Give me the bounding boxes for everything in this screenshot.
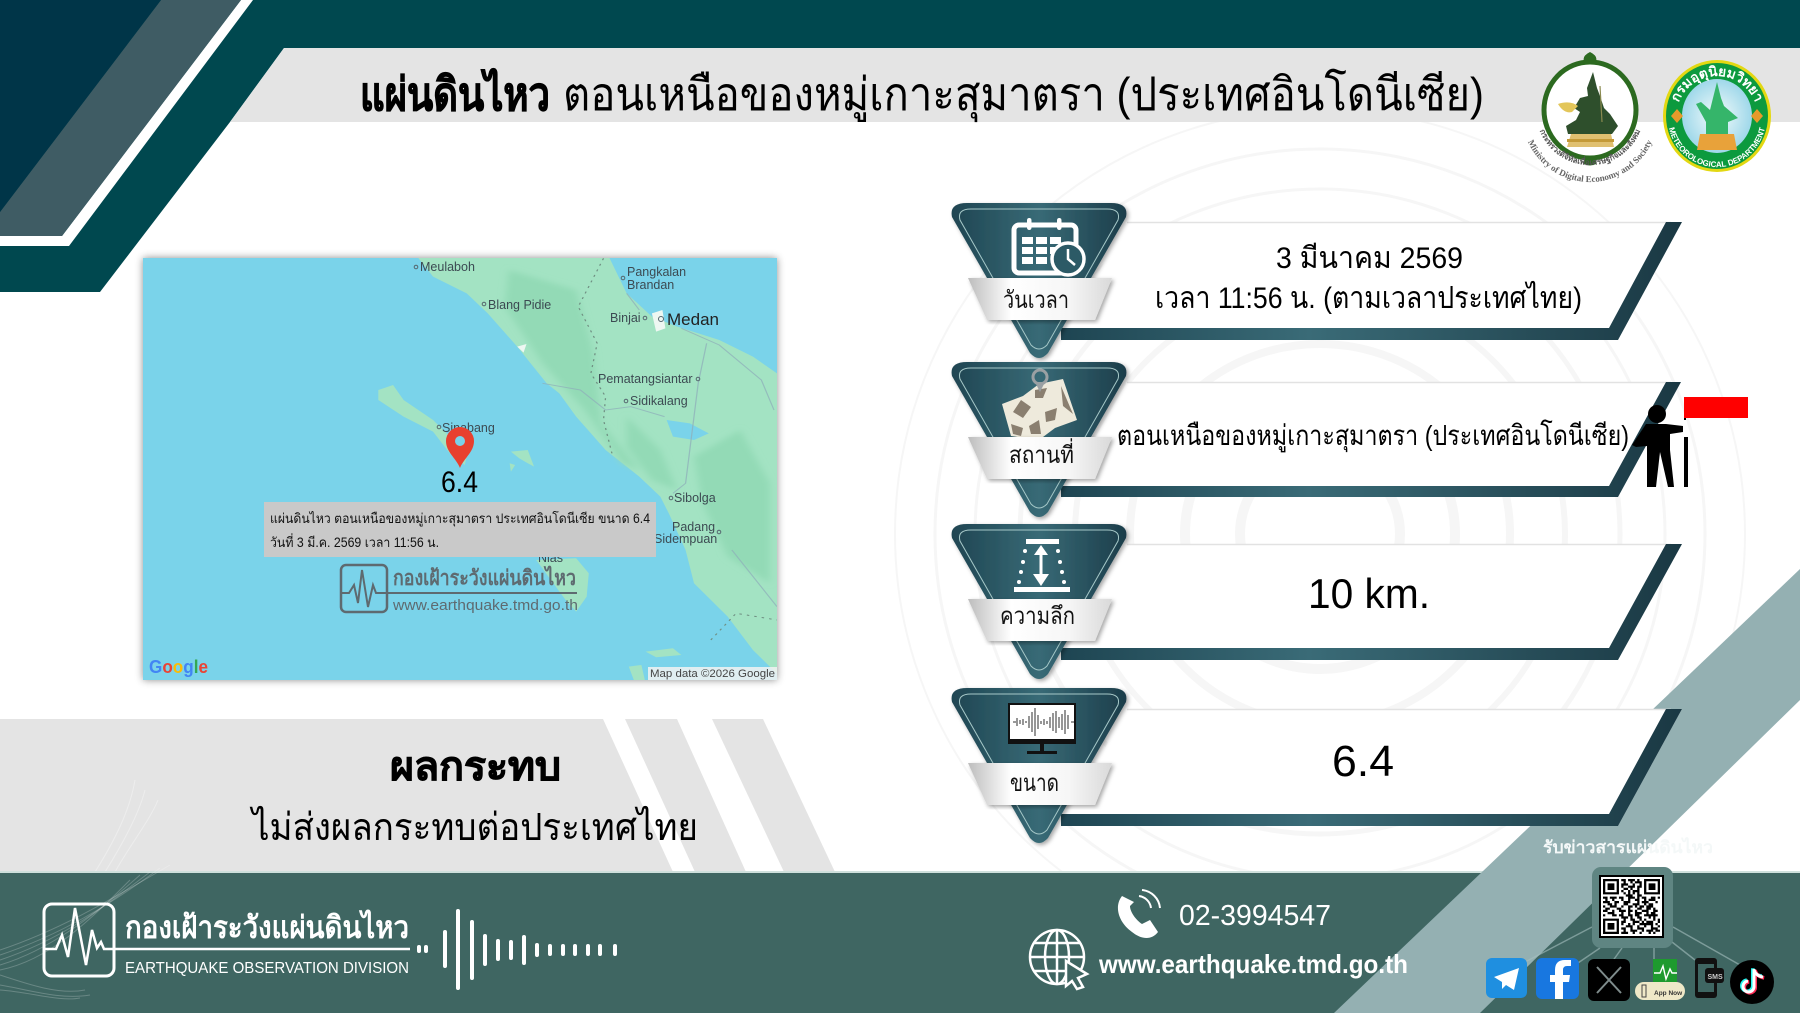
info row: magnitude xyxy=(952,688,1682,843)
ribbon label xyxy=(968,763,1112,805)
info row: location xyxy=(952,362,1681,517)
logo: Meteorological Department: กรมอุตุนิยมวิทยา xyxy=(1672,65,1762,102)
map panel xyxy=(143,250,787,683)
icon: person with red flag xyxy=(1632,397,1748,487)
map: place labels: Binjai xyxy=(610,311,641,325)
logo: Meteorological Department xyxy=(1663,60,1771,172)
map: place labels: Sinabang xyxy=(442,421,495,435)
map: caption box: วันที่ 3 มี.ค. 2569 เวลา 11:56 น. xyxy=(270,533,439,550)
corner: grey slate stripe xyxy=(0,0,241,236)
social icon: earthquake app: App Now xyxy=(1654,990,1683,997)
header: teal top band and corner shape xyxy=(0,0,1800,292)
map: place labels: Brandan xyxy=(627,278,674,292)
footer wave decoration xyxy=(0,865,170,999)
map: lake xyxy=(667,420,709,440)
row 1 panel xyxy=(1061,222,1682,340)
footer waveform xyxy=(419,911,615,988)
web icon xyxy=(1030,930,1087,989)
row 1 value: เวลา 11:56 น. (ตามเวลาประเทศไทย) xyxy=(1155,280,1582,315)
row 2 panel xyxy=(1061,382,1681,497)
map: place labels: Sidempuan xyxy=(654,532,717,546)
corner: dark navy xyxy=(0,0,161,212)
connector lines xyxy=(1525,927,1740,965)
logo: Ministry of Digital Economy and Society xyxy=(1528,52,1652,182)
ribbon label: ความลึก xyxy=(1000,603,1075,630)
row 3 panel xyxy=(1061,544,1682,660)
social icon: Facebook xyxy=(1536,958,1579,999)
footer logo: division: กองเฝ้าระวังแผ่นดินไหว xyxy=(125,909,409,945)
row 1 badge xyxy=(952,203,1126,358)
map: place labels xyxy=(414,260,721,565)
row 4 badge xyxy=(952,688,1126,843)
background concentric rings xyxy=(895,109,1745,959)
logo: Meteorological Department: METEOROLOGICAL DEPARTMENT xyxy=(1669,126,1764,168)
footer logo: division xyxy=(44,904,410,977)
info row: depth xyxy=(952,524,1682,679)
social icon: Telegram xyxy=(1486,958,1527,998)
icon: depth arrow xyxy=(1014,539,1070,592)
QR code xyxy=(1592,867,1673,948)
map: land and islands xyxy=(378,250,787,683)
map: place labels: Sibolga xyxy=(674,491,716,505)
row 2 value: ตอนเหนือของหมู่เกาะสุมาตรา (ประเทศอินโดนีเซีย) xyxy=(1117,419,1629,453)
diagonal light strip xyxy=(1334,569,1800,1013)
icon: seismograph monitor xyxy=(1009,704,1075,754)
social icon: X xyxy=(1588,959,1630,1001)
map: place labels: Medan xyxy=(667,310,719,329)
map: epicentre pin xyxy=(446,427,474,468)
logo: Ministry of Digital Economy and Society: Ministry of Digital Economy and Society xyxy=(1528,139,1652,182)
social icon: earthquake app xyxy=(1635,959,1685,1000)
map: place labels: Blang Pidie xyxy=(488,298,551,312)
map: caption box xyxy=(264,502,656,557)
icon: folded map xyxy=(1002,370,1077,440)
social icon: TikTok xyxy=(1730,960,1774,1004)
map: place labels: Padang xyxy=(672,520,715,534)
footer band xyxy=(0,871,1800,1013)
ribbon label: วันเวลา xyxy=(1003,287,1069,314)
map: place labels: Meulaboh xyxy=(420,260,475,274)
row 4 panel xyxy=(1061,709,1682,826)
ribbon label xyxy=(968,599,1112,641)
map: place labels: Pangkalan xyxy=(627,265,686,279)
title bar xyxy=(230,48,1800,123)
row 3 value: 10 km. xyxy=(1308,570,1430,617)
map: place labels: Sidikalang xyxy=(630,394,688,408)
map: place labels: Pematangsiantar xyxy=(598,372,693,386)
ribbon label xyxy=(968,437,1112,479)
map: roads and borders xyxy=(542,293,777,607)
footer logo: division: EARTHQUAKE OBSERVATION DIVISION xyxy=(125,960,409,977)
social icon: SMS phone xyxy=(1695,958,1724,998)
icon: calendar xyxy=(1014,218,1084,275)
phone icon xyxy=(1118,890,1160,938)
map: place labels: Nias xyxy=(538,551,563,565)
map: magnitude label: 6.4 xyxy=(441,466,478,499)
map: attribution: Map data ©2026 Google xyxy=(650,668,775,680)
map: Google logo: Google xyxy=(149,657,208,677)
phone number: 02-3994547 xyxy=(1179,900,1331,932)
map: division watermark: www.earthquake.tmd.go.th xyxy=(392,597,578,614)
map: division watermark: กองเฝ้าระวังแผ่นดินไหว xyxy=(393,565,576,590)
row 4 value: 6.4 xyxy=(1332,737,1394,786)
ribbon label: ขนาด xyxy=(1010,770,1059,797)
row 3 badge xyxy=(952,524,1126,679)
map: division watermark xyxy=(341,565,578,614)
impact text: ไม่ส่งผลกระทบต่อประเทศไทย xyxy=(249,806,698,849)
title text: แผ่นดินไหว xyxy=(360,68,550,120)
social icon: SMS phone: SMS xyxy=(1708,974,1723,981)
row 2 badge xyxy=(952,362,1126,517)
impact heading: ผลกระทบ xyxy=(390,745,561,789)
impact panel xyxy=(0,719,835,872)
logo: Ministry of Digital Economy and Society: กระทรวงดิจิทัลเพื่อเศรษฐกิจและสังคม xyxy=(1540,129,1640,166)
ribbon label: สถานที่ xyxy=(1009,438,1074,469)
corner: white stripe xyxy=(0,0,253,246)
title text: ตอนเหนือของหมู่เกาะสุมาตรา (ประเทศอินโดนีเซีย) xyxy=(563,68,1484,123)
row 1 value: 3 มีนาคม 2569 xyxy=(1276,242,1463,275)
map: caption box: แผ่นดินไหว ตอนเหนือของหมู่เกาะสุมาตรา ประเทศอินโดนีเซีย ขนาด 6.4 xyxy=(270,510,650,527)
website address: www.earthquake.tmd.go.th xyxy=(1098,949,1408,979)
news heading: รับข่าวสารแผ่นดินไหว xyxy=(1543,837,1713,857)
row 1 value xyxy=(1155,242,1582,315)
ribbon label xyxy=(968,278,1112,320)
info row: date and time xyxy=(952,203,1682,358)
